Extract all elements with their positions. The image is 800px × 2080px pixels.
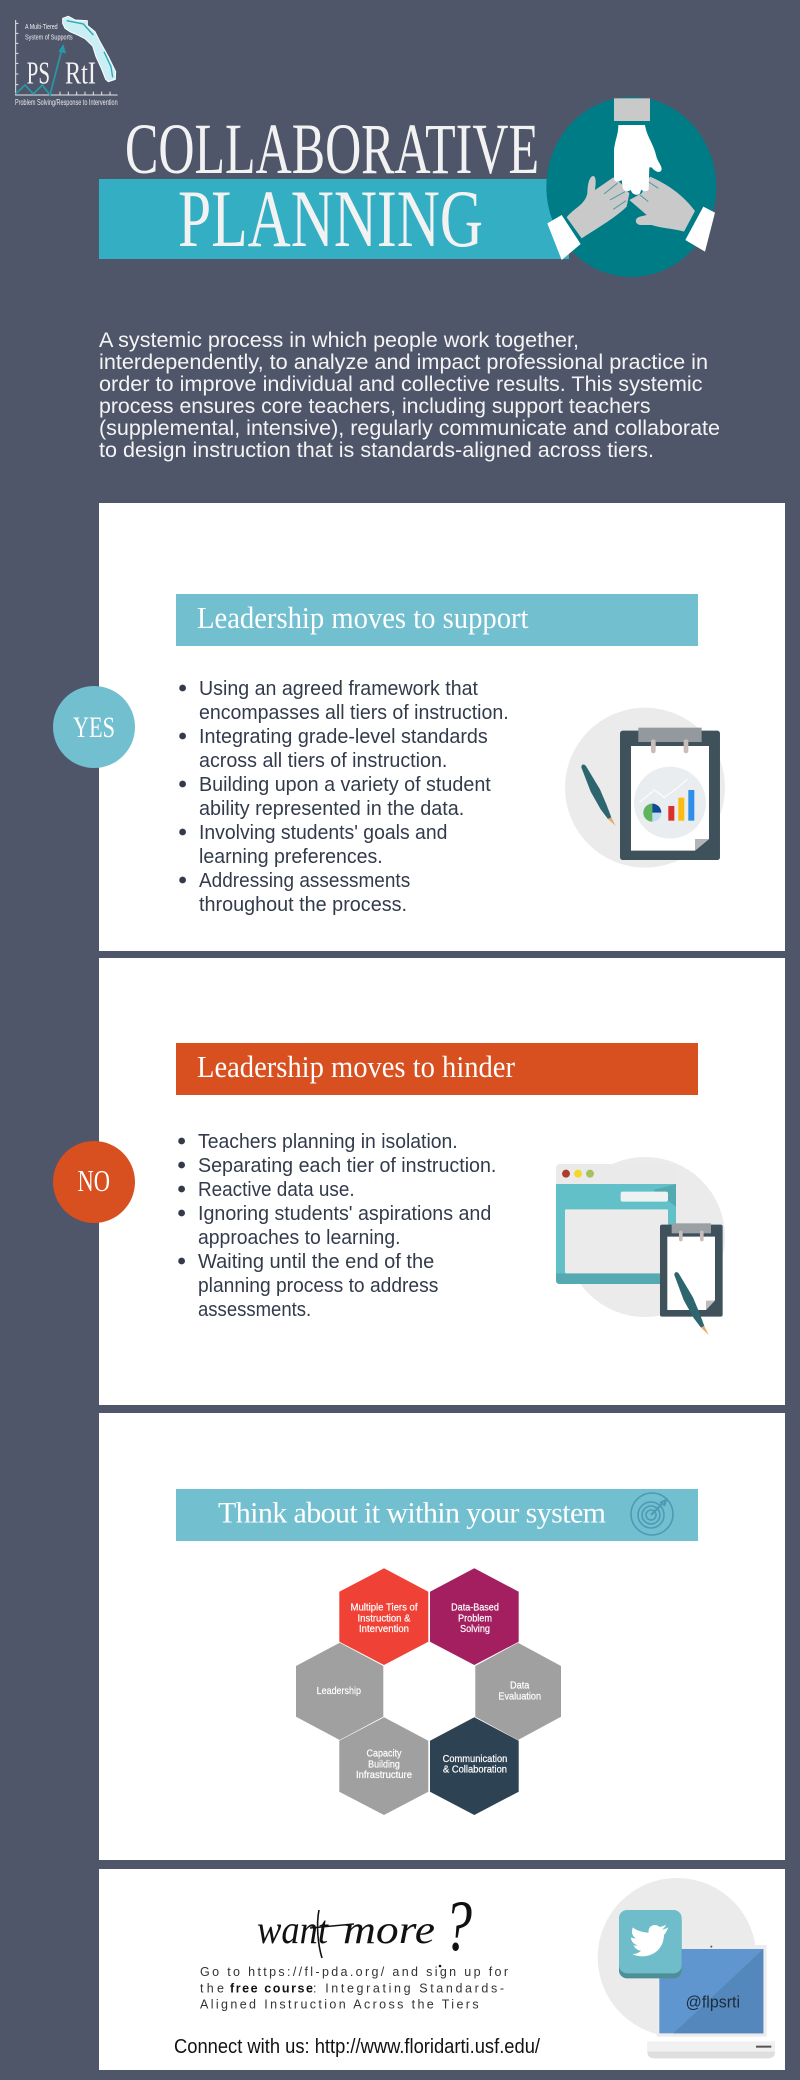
logo: PS/RtI: A Multi-Tiered (25, 22, 58, 31)
hexagon: data-based problem solving: Problem (458, 1612, 492, 1624)
logo: PS/RtI: System of Supports (25, 32, 73, 41)
course text: : Integrating Standards- (313, 1981, 504, 1995)
bullet list: support: learning preferences. (199, 846, 383, 868)
heading: hinder (176, 1043, 698, 1095)
website link: Connect with us: http://www.floridarti.usf.edu/ (174, 2036, 540, 2058)
bullet list: hinder: planning process to address (198, 1275, 438, 1297)
badge: yes: YES (73, 711, 115, 744)
title: Planning: PLANNING (178, 173, 483, 264)
panel: leadership moves to support (53, 503, 785, 951)
course text: the (200, 1981, 224, 1995)
intro text: interdependently, to analyze and impact professional practice in (99, 351, 708, 374)
hexagon: data evaluation (475, 1643, 561, 1740)
bullet list: support (179, 678, 509, 916)
bullet list: support: Integrating grade-level standards (199, 726, 488, 748)
heading: support: Leadership moves to support (197, 600, 529, 635)
hexagon diagram (296, 1568, 561, 1815)
icon: Florida map (63, 16, 116, 82)
title banner band (99, 179, 569, 259)
intro text: A systemic process in which people work together, (99, 329, 579, 352)
course text: Go to https://fl-pda.org/ and sign up for (200, 1965, 508, 1979)
logo: PS/RtI (15, 16, 118, 107)
logo: PS/RtI: Problem Solving/Response to Intervention (15, 98, 118, 107)
hexagon: multiple tiers: Instruction & (358, 1612, 410, 1624)
icon: target (631, 1493, 673, 1535)
hexagon: communication: & Collaboration (443, 1764, 507, 1776)
intro text (99, 329, 720, 462)
bullet list: support: throughout the process. (199, 894, 407, 916)
icon: joined hands (546, 97, 716, 277)
bullet list: hinder: approaches to learning. (198, 1227, 400, 1249)
bullet list: support: Addressing assessments (199, 870, 410, 892)
intro text: (supplemental, intensive), regularly communicate and collaborate (99, 417, 720, 440)
icon: browser window and clipboard (556, 1157, 725, 1335)
hexagon: capacity building (339, 1717, 428, 1815)
heading: want more (257, 1886, 472, 1966)
hexagon: leadership (296, 1643, 383, 1740)
hexagon: multiple tiers: Intervention (359, 1623, 409, 1635)
panel: think about it within your system (99, 1413, 785, 1860)
bullet list: support: across all tiers of instruction. (199, 750, 447, 772)
bullet list: support: encompasses all tiers of instruction. (199, 702, 509, 724)
bullet list: hinder: assessments. (198, 1299, 311, 1321)
heading: want more: more (343, 1907, 435, 1952)
hexagon: multiple tiers: Multiple Tiers of (350, 1602, 418, 1614)
course text (200, 1965, 508, 2011)
badge: yes (53, 686, 135, 768)
hexagon: leadership: Leadership (317, 1685, 361, 1697)
bullet list: hinder: Reactive data use. (198, 1179, 355, 1201)
bullet list: support: Building upon a variety of student (199, 774, 491, 796)
hexagon: capacity building: Infrastructure (356, 1769, 412, 1781)
intro text: to design instruction that is standards-aligned across tiers. (99, 439, 654, 462)
heading: want more: want (257, 1907, 329, 1952)
intro text: process ensures core teachers, including support teachers (99, 395, 650, 418)
heading: think about it (176, 1489, 698, 1541)
hexagon: data-based problem solving: Data-Based (451, 1602, 499, 1614)
bullet list: hinder: Teachers planning in isolation. (198, 1131, 458, 1153)
hexagon: data evaluation: Evaluation (498, 1690, 541, 1702)
course text: Aligned Instruction Across the Tiers (200, 1997, 479, 2011)
hexagon: multiple tiers (339, 1568, 428, 1665)
badge: no (53, 1141, 135, 1223)
hexagon: data-based problem solving: Solving (460, 1623, 490, 1635)
title: Collaborative: COLLABORATIVE (125, 109, 539, 189)
heading: think about it: Think about it within your system (218, 1497, 606, 1530)
bullet list: support: Involving students' goals and (199, 822, 447, 844)
panel: want more (99, 1869, 785, 2070)
twitter handle: @flpsrti (686, 1992, 740, 2011)
hexagon: capacity building: Building (368, 1758, 400, 1770)
icon: clipboard with charts (565, 708, 725, 868)
hexagon: capacity building: Capacity (366, 1748, 402, 1760)
hexagon: communication (430, 1717, 519, 1815)
panel: leadership moves to hinder (53, 958, 785, 1405)
hexagon: data evaluation: Data (510, 1680, 529, 1692)
bullet list: hinder: Ignoring students' aspirations and (198, 1203, 491, 1225)
course text: free course (230, 1981, 313, 1995)
hexagon: data-based problem solving (430, 1568, 519, 1665)
bullet list: hinder: Separating each tier of instruction. (198, 1155, 496, 1177)
bullet list: support: Using an agreed framework that (199, 678, 478, 700)
hexagon: communication: Communication (443, 1753, 507, 1765)
bullet list: hinder (178, 1131, 496, 1321)
heading: support (176, 594, 698, 646)
heading: hinder: Leadership moves to hinder (197, 1049, 516, 1084)
heading: want more: ? (444, 1886, 472, 1966)
bullet list: hinder: Waiting until the end of the (198, 1251, 434, 1273)
icon: laptop with twitter tile (598, 1878, 775, 2058)
bullet list: support: ability represented in the data. (199, 798, 464, 820)
logo: PS/RtI: RtI (65, 55, 96, 90)
badge: no: NO (78, 1163, 110, 1198)
logo: PS/RtI: PS (27, 55, 50, 90)
intro text: order to improve individual and collective results. This systemic (99, 373, 702, 396)
